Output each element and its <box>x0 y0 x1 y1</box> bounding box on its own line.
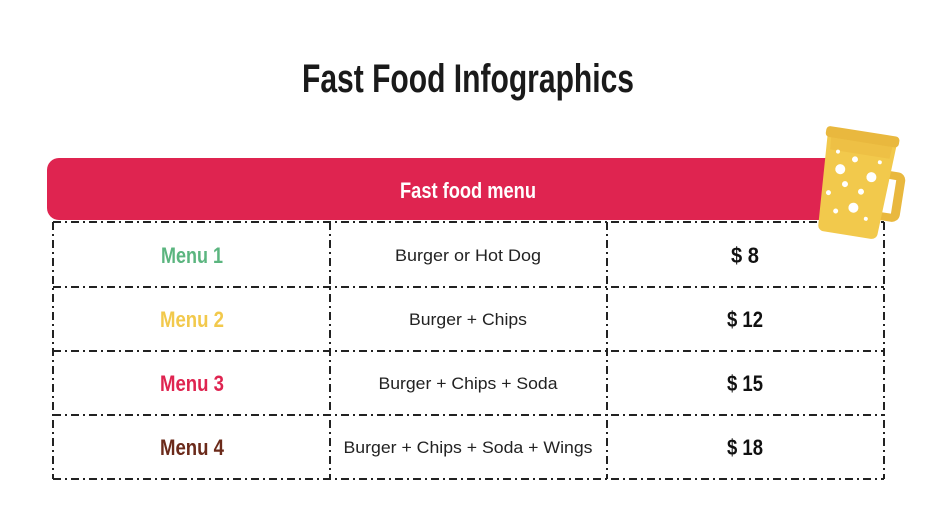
row 1: Burger or Hot Dog <box>395 246 541 265</box>
row 4: Burger + Chips + Soda + Wings <box>344 438 592 457</box>
row 3: Menu 3 <box>160 371 224 396</box>
row 2 <box>160 307 763 332</box>
row 3: $ 15 <box>727 371 763 396</box>
header bar <box>47 158 847 220</box>
icon: beer mug <box>811 126 912 243</box>
row 1: Menu 1 <box>161 243 223 268</box>
row 2: $ 12 <box>727 307 763 332</box>
row 2: Menu 2 <box>160 307 224 332</box>
table <box>53 222 884 479</box>
title: Fast Food Infographics <box>302 57 634 101</box>
header text: Fast food menu <box>400 178 536 203</box>
row 2: Burger + Chips <box>409 310 527 329</box>
row 4 <box>160 435 763 460</box>
row 3 <box>160 371 763 396</box>
row 1: $ 8 <box>731 243 759 268</box>
row 4: $ 18 <box>727 435 763 460</box>
row 3: Burger + Chips + Soda <box>378 374 558 393</box>
row 1 <box>161 243 759 268</box>
row 4: Menu 4 <box>160 435 225 460</box>
